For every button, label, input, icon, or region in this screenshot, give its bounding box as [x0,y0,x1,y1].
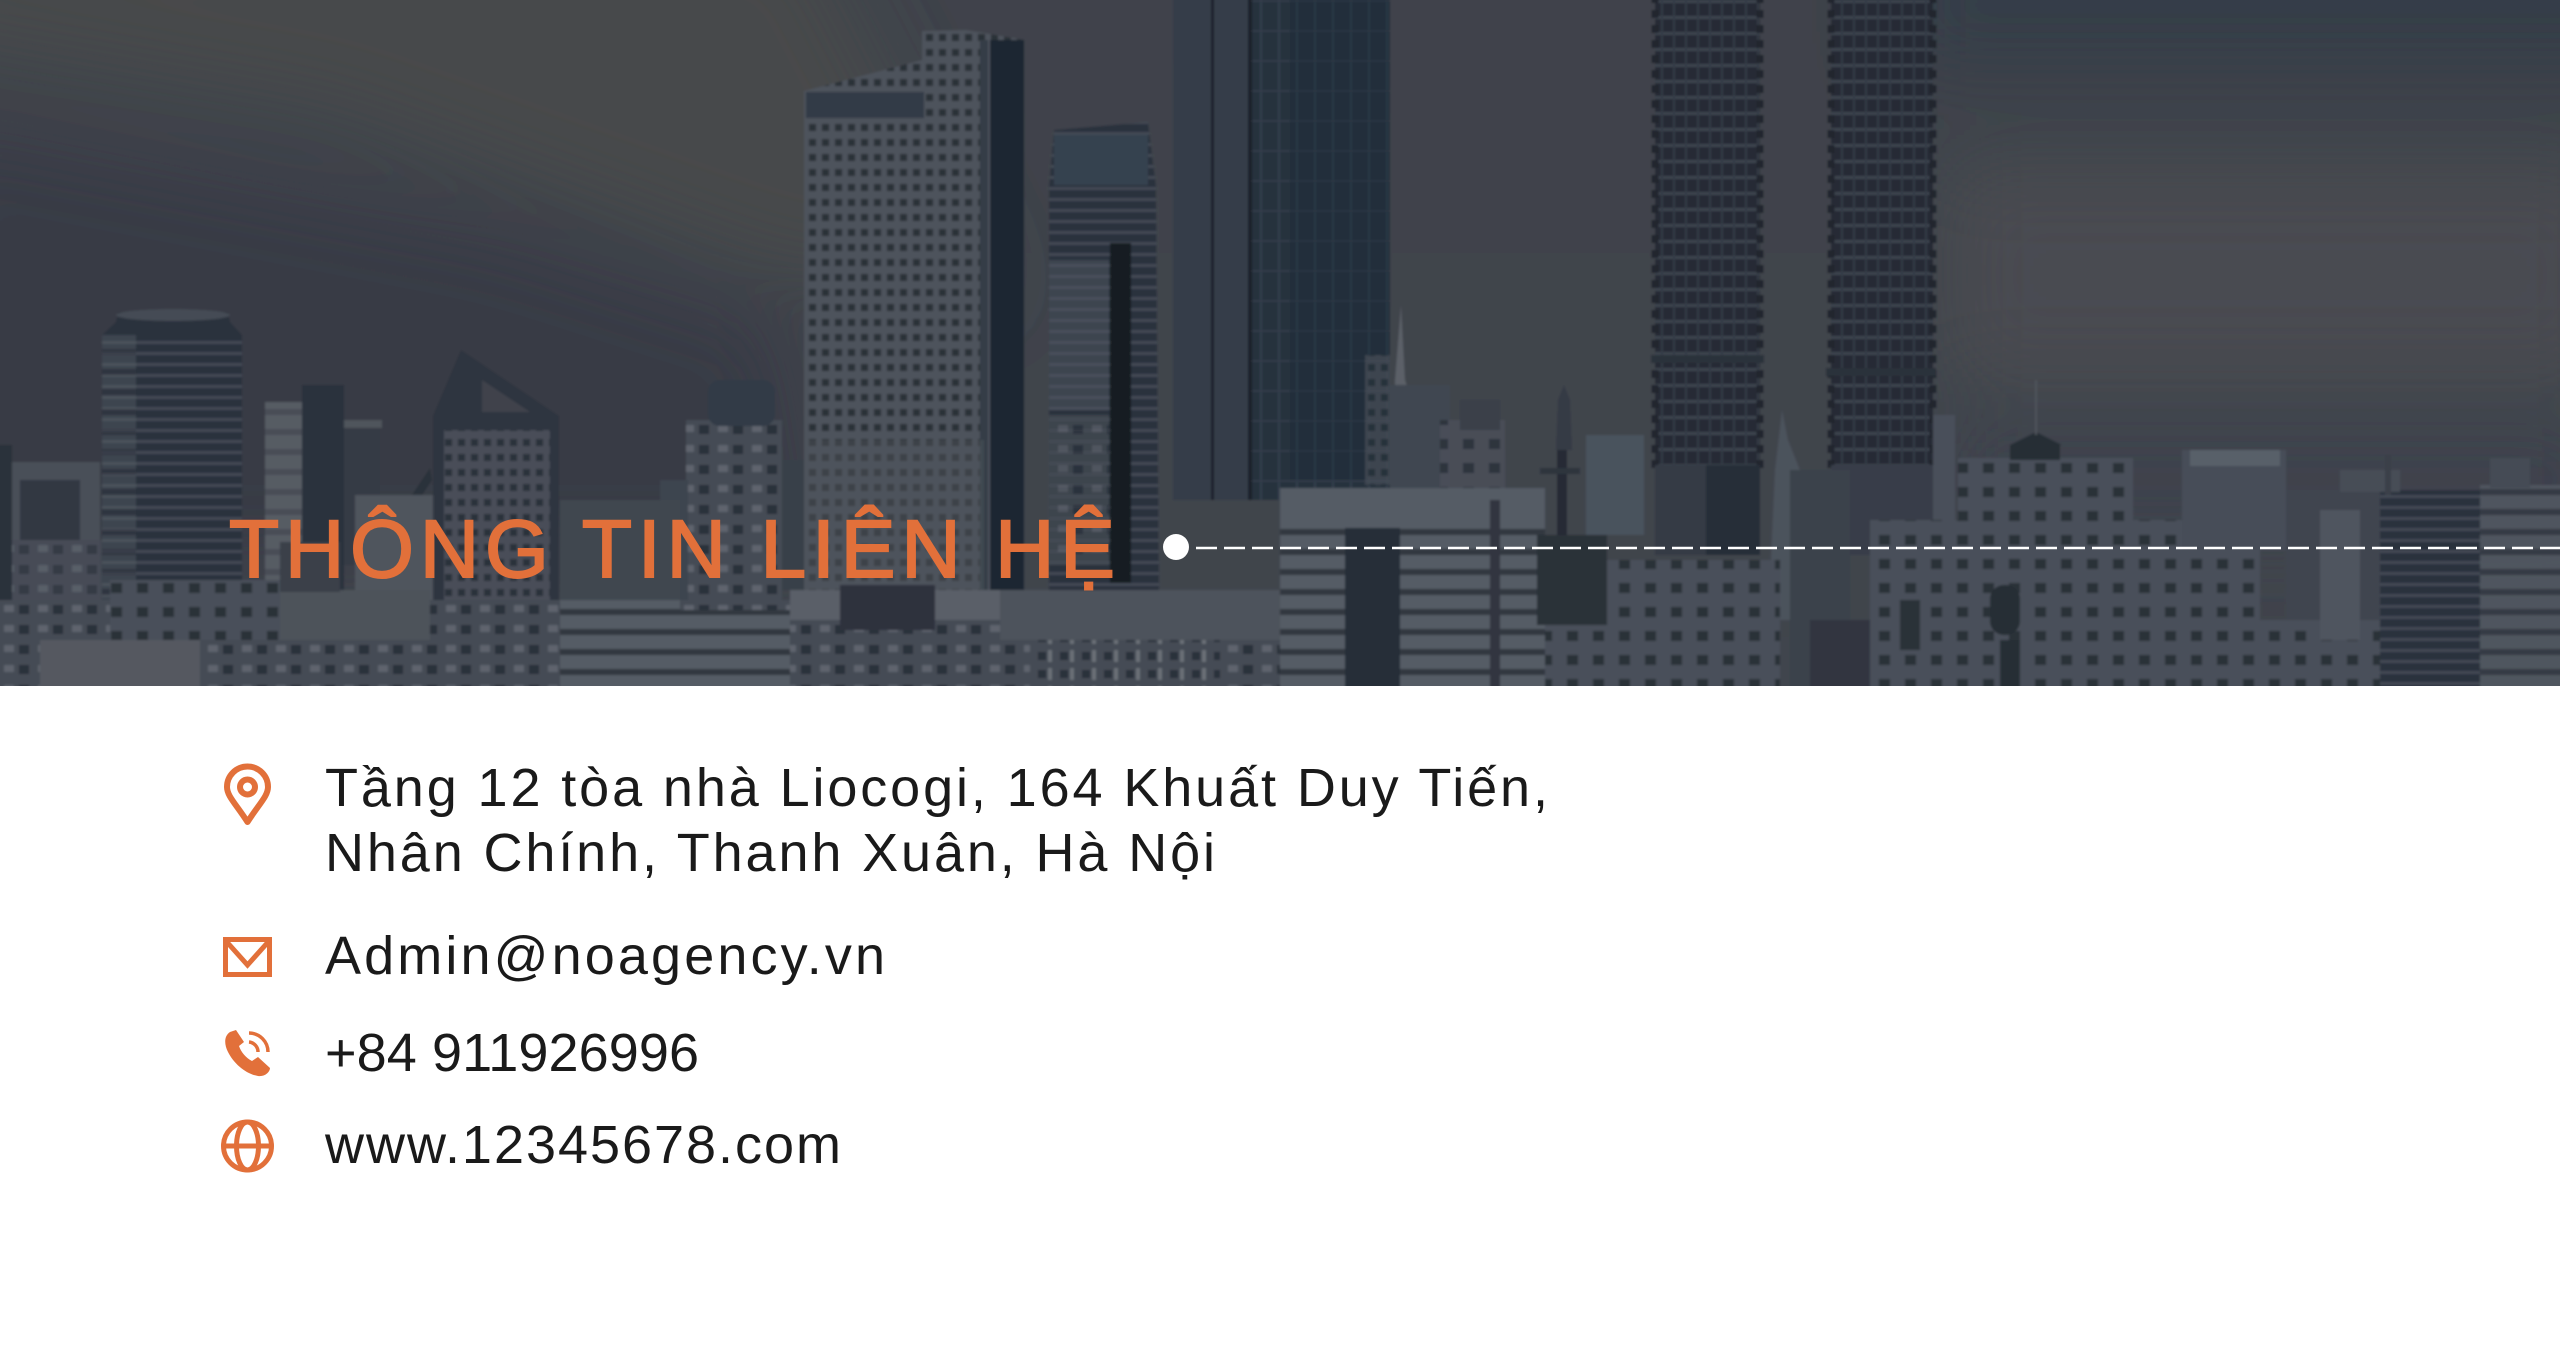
icon: phone [225,1030,270,1076]
tower F [1049,122,1159,590]
building B [264,386,432,590]
sky [0,0,2560,730]
twin towers [1651,0,1936,555]
email text: Admin@noagency.vn [325,926,885,986]
icon: location pin [227,766,268,822]
address text: Nhân Chính, Thanh Xuân, Hà Nội [325,823,1215,883]
glass tower G [1173,0,1390,500]
mid-right skyline [1390,305,1955,620]
central low-rise with dark column [1278,470,1870,686]
left low-rise foreground [0,542,1280,686]
icon: globe [223,1122,272,1170]
website text: www.12345678.com [324,1115,841,1175]
timeline dot and dashed line [1163,534,2560,560]
header photo: city skyline [0,0,2560,730]
mid-left low-rise behind title [560,500,680,600]
domed classical buildings [1870,382,2380,686]
tower A [102,309,242,625]
phone text: +84 911926996 [325,1023,699,1083]
triangle-top building [354,352,559,600]
title: THÔNG TIN LIÊN HỆ [229,504,1115,595]
hazy far-left buildings [0,446,102,600]
address text [325,758,1548,883]
address text: Tầng 12 tòa nhà Liocogi, 164 Khuất Duy Tiến, [325,758,1548,818]
tall tower E [804,30,1024,610]
icon: envelope [226,940,270,974]
construction buildings on the right [2182,449,2560,686]
drum-top building D [662,380,782,599]
